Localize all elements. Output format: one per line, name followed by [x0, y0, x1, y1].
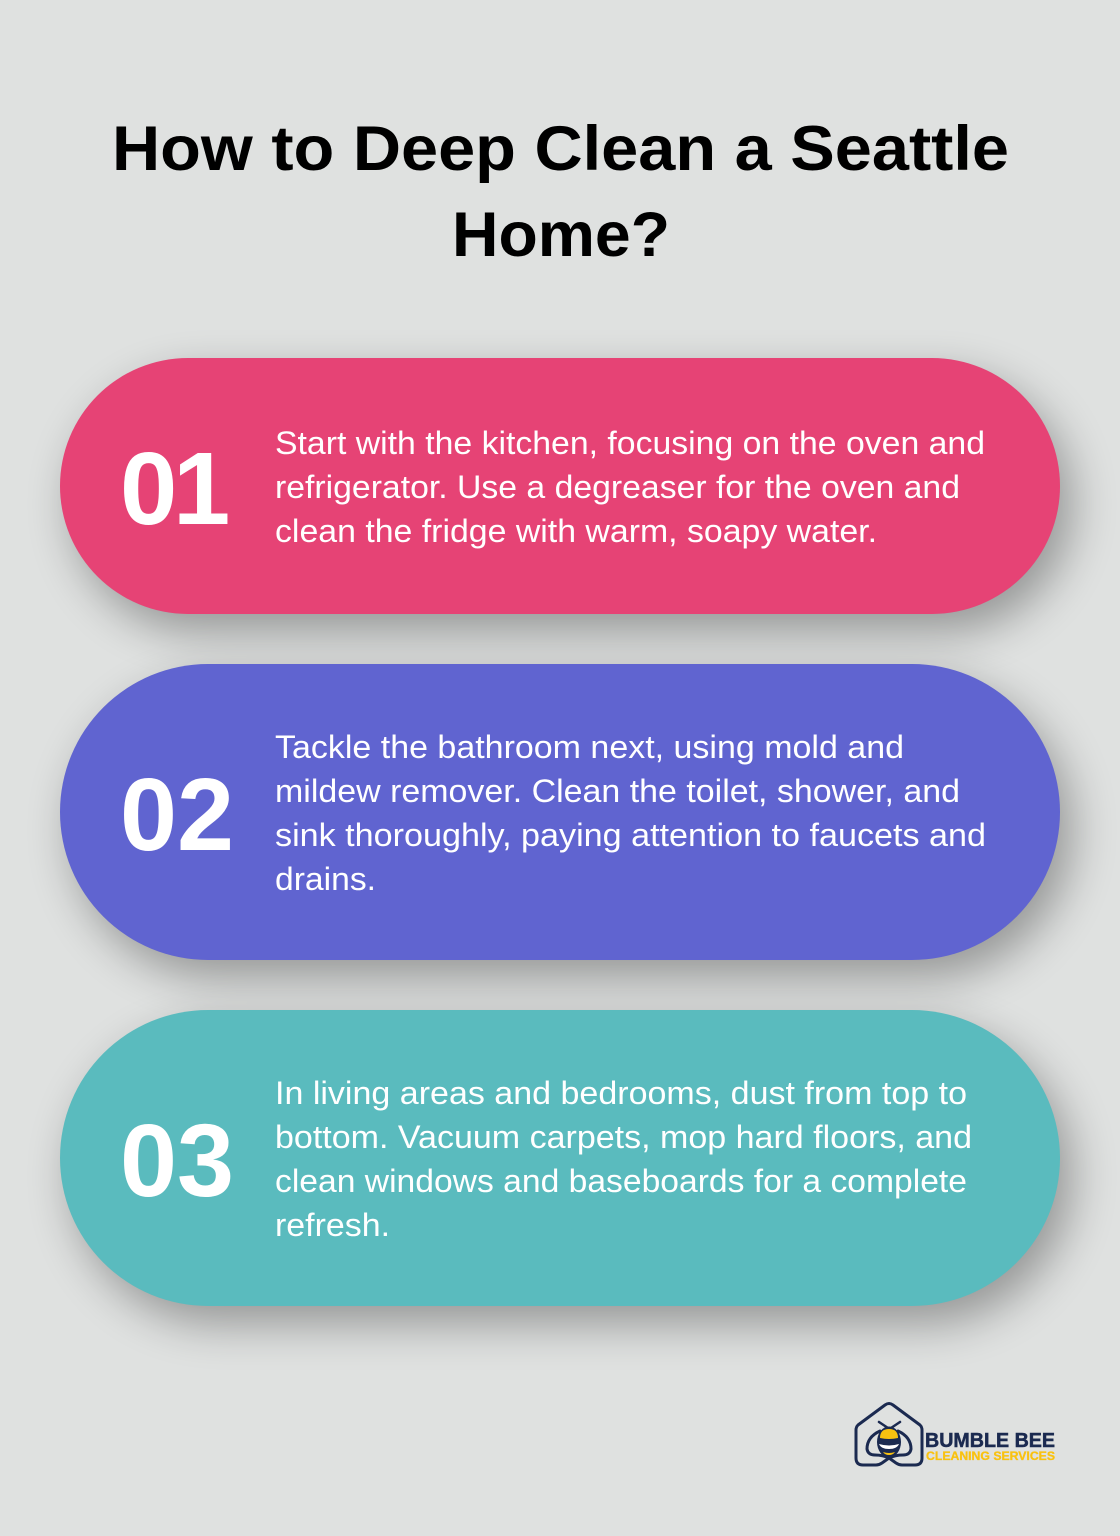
- step 03 text: In living areas and bedrooms, dust from top to: [275, 1075, 967, 1111]
- step 01 text: [275, 425, 985, 549]
- step 02 text: drains.: [275, 861, 376, 897]
- step 03 text: clean windows and baseboards for a complete: [275, 1163, 967, 1199]
- step 03 number: 03: [120, 1103, 234, 1218]
- title: [112, 114, 1009, 270]
- step 03 text: [275, 1075, 972, 1243]
- step 02 text: mildew remover. Clean the toilet, shower, and: [275, 773, 960, 809]
- panel: step 03 background: [60, 1010, 1060, 1306]
- step 02 text: [275, 729, 986, 897]
- title: Home?: [452, 200, 670, 270]
- logo: Bumble Bee Cleaning Services: [856, 1404, 1055, 1465]
- step 01 text: Start with the kitchen, focusing on the oven and: [275, 425, 985, 461]
- step 03 text: bottom. Vacuum carpets, mop hard floors, and: [275, 1119, 972, 1155]
- step 02 number: 02: [120, 757, 234, 872]
- logo name: BUMBLE BEE: [925, 1430, 1055, 1452]
- step 03 text: refresh.: [275, 1207, 390, 1243]
- step 01 number: [120, 431, 230, 546]
- step 01 number: 0: [120, 431, 177, 546]
- step 02 text: Tackle the bathroom next, using mold and: [275, 729, 904, 765]
- logo tagline: CLEANING SERVICES: [926, 1449, 1055, 1463]
- title: How to Deep Clean a Seattle: [112, 114, 1009, 184]
- panel: step 01 background: [60, 358, 1060, 614]
- step 02 text: sink thoroughly, paying attention to faucets and: [275, 817, 986, 853]
- step 01 text: refrigerator. Use a degreaser for the oven and: [275, 469, 960, 505]
- panel: step 02 background: [60, 664, 1060, 960]
- step 01 text: clean the fridge with warm, soapy water.: [275, 513, 877, 549]
- step 01 number: 1: [173, 431, 230, 546]
- icon: house with bee: [856, 1404, 922, 1465]
